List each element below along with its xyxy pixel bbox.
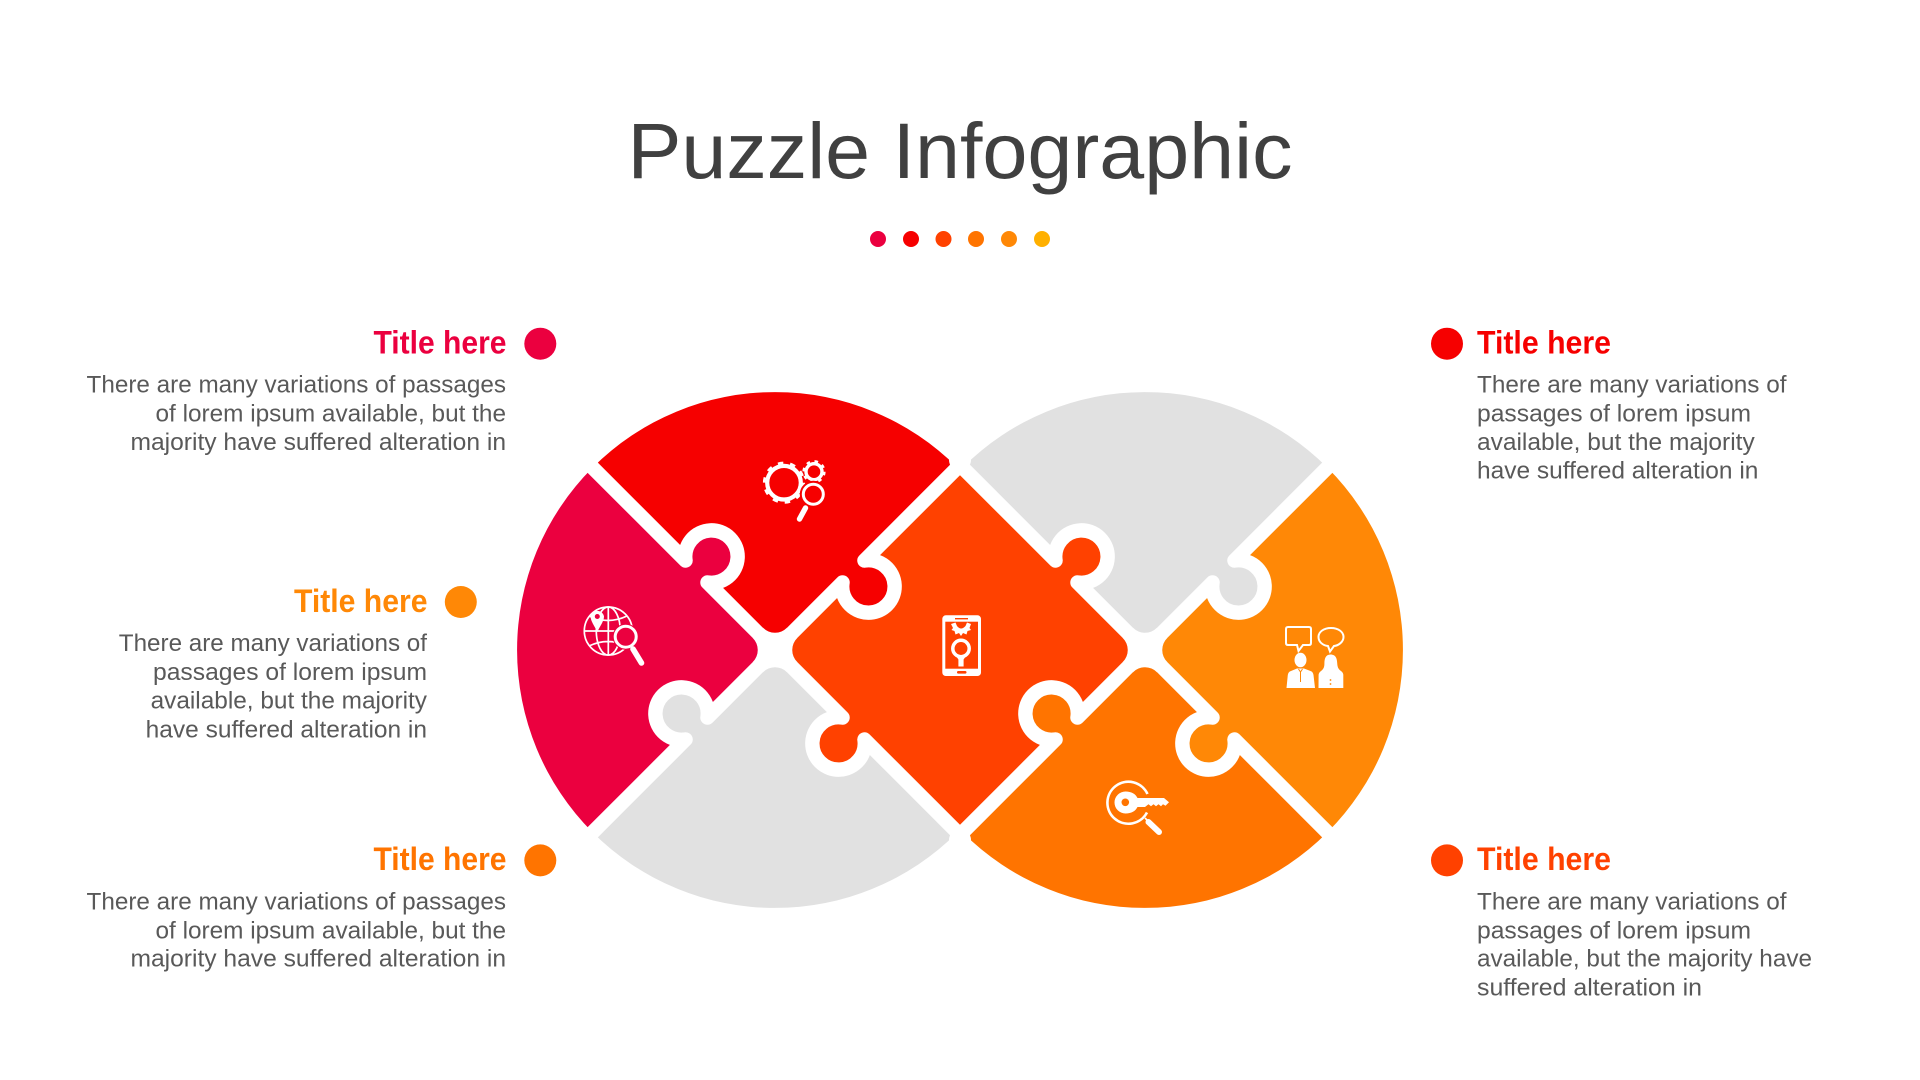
callout: middle left: have suffered alteration in — [146, 716, 427, 744]
callout: top right: available, but the majority — [1477, 429, 1755, 456]
puzzle piece: crimson left — [517, 468, 775, 832]
callout: top left: Title here — [374, 324, 506, 360]
callout: top right: There are many variations of — [1477, 372, 1787, 399]
callout: top right: Title here — [1477, 324, 1611, 360]
callout: bottom left: of lorem ipsum available, but the — [156, 917, 506, 944]
callout: bottom right: available, but the majority have — [1477, 946, 1812, 973]
puzzle piece: grey top right circle — [963, 392, 1327, 650]
callout: top left: There are many variations of passages — [86, 372, 506, 399]
callout: bottom left: Title here — [374, 841, 506, 877]
icon: globe search — [584, 607, 642, 663]
callout: top right: have suffered alteration in — [1477, 458, 1758, 485]
puzzle piece: grey bottom left circle — [593, 650, 957, 908]
callout: middle left — [119, 583, 477, 744]
title: Puzzle Infographic — [628, 106, 1292, 195]
callout: top left — [86, 324, 556, 456]
puzzle piece: red top left circle — [593, 392, 957, 650]
callout: middle left: available, but the majority — [151, 688, 427, 715]
white gaps between pieces — [556, 431, 1364, 869]
puzzle piece: orange bottom right circle — [963, 650, 1327, 908]
callout: bottom right: passages of lorem ipsum — [1477, 917, 1751, 944]
icon: phone with gear and magnifier — [942, 615, 981, 676]
callout: top left: of lorem ipsum available, but the — [156, 401, 506, 428]
callout: middle left: passages of lorem ipsum — [153, 659, 427, 686]
icon: key search — [1107, 782, 1169, 832]
callout: middle left: There are many variations of — [119, 630, 427, 657]
puzzle piece: orange right — [1145, 468, 1403, 832]
puzzle piece: orange-red centre — [775, 465, 1145, 835]
callout: bottom right — [1431, 841, 1812, 1001]
callout: top right: passages of lorem ipsum — [1477, 401, 1751, 428]
icon: gears and magnifier — [764, 461, 826, 519]
callout: bottom right: Title here — [1477, 841, 1611, 877]
callout: top right — [1431, 324, 1787, 485]
callout: bottom right: There are many variations of — [1477, 888, 1787, 915]
callout: top left: majority have suffered alteration in — [130, 429, 506, 456]
icon: two people talking — [1286, 627, 1344, 688]
callout: bottom left — [86, 841, 556, 973]
callout: bottom left: There are many variations of passages — [86, 888, 506, 915]
callout: bottom left: majority have suffered alteration in — [130, 946, 506, 973]
title dots — [870, 231, 1050, 247]
callout: bottom right: suffered alteration in — [1477, 974, 1702, 1001]
callout: middle left: Title here — [294, 583, 428, 619]
